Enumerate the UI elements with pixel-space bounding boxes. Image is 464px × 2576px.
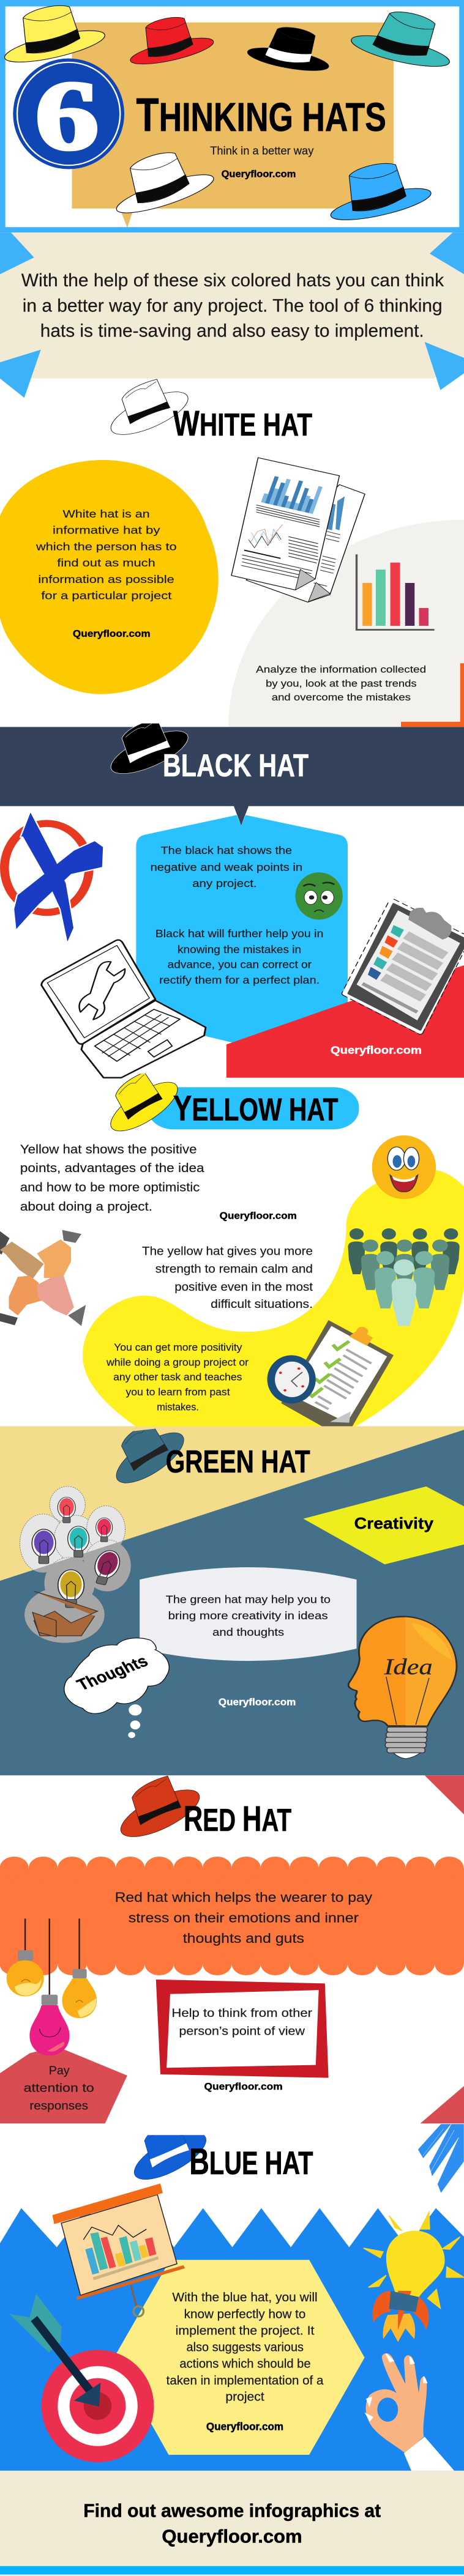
text: black hat description 1: [151, 844, 302, 889]
brand: Queryfloor.com: [220, 1209, 297, 1221]
footer cream panel: [0, 2471, 464, 2566]
intro ribbon: hats is time-saving and also easy to implement.: [40, 321, 424, 341]
text: white hat description: informative hat by: [53, 524, 160, 536]
footer text: Find out awesome infographics at: [83, 2501, 381, 2522]
icon: idea head bulb: Idea: [383, 1655, 433, 1680]
brand: Queryfloor.com: [331, 1045, 422, 1056]
icon: blue fedora: [133, 2135, 206, 2180]
center text panel: [140, 1567, 357, 1661]
panel: pay attention: [0, 2046, 127, 2123]
text: yellow hat intro: about doing a project.: [20, 1199, 152, 1213]
text: black hat description 1: negative and weak points in: [151, 861, 302, 874]
panel: pay attention: attention to: [24, 2081, 94, 2095]
sand background: [0, 1426, 464, 1775]
center text panel: The green hat may help you to: [166, 1594, 331, 1606]
center text panel: bring more creativity in ideas: [168, 1609, 328, 1622]
icon: teal top hat: [343, 0, 464, 92]
text: blue hat description: also suggests various: [187, 2340, 304, 2355]
heading: RED HAT: [184, 1799, 291, 1839]
text: blue hat description: With the blue hat, you will: [172, 2290, 318, 2304]
section: yellow hat: [0, 1067, 464, 1427]
text: group positivity: while doing a group project or: [106, 1357, 249, 1368]
text: analyze: Analyze the information collected: [256, 664, 426, 675]
icon: green fedora: [116, 1429, 184, 1483]
section: blue hat: [0, 2119, 464, 2576]
icon: red fedora: [113, 1776, 208, 1846]
icon: laptop with wrench: [42, 940, 206, 1078]
icon: yellow fedora: [110, 1073, 178, 1132]
intro ribbon: [0, 232, 464, 398]
panel: other point of view: [156, 1980, 329, 2078]
text: blue hat description: implement the project. It: [176, 2323, 315, 2338]
text: blue hat description: project: [225, 2389, 264, 2403]
text: black hat description 2: rectify them for a perfect plan.: [159, 974, 320, 986]
brand: Queryfloor.com: [219, 1696, 296, 1707]
text: group positivity: [106, 1342, 249, 1413]
icon: smiling emoji: [372, 1135, 436, 1199]
icon: joined hands: [0, 1230, 86, 1326]
text: white hat description: find out as much: [57, 557, 155, 570]
icon: crossed circle: [4, 812, 103, 941]
text: black hat description 2: knowing the mistakes in: [178, 943, 301, 956]
brand: Queryfloor.com: [204, 2080, 283, 2092]
panel: other point of view: Help to think from other: [171, 2006, 312, 2020]
blue scribble: [418, 2124, 464, 2193]
text: blue hat description: know perfectly how to: [184, 2307, 305, 2322]
text: black hat description 1: The black hat shows the: [160, 844, 292, 857]
icon: target with arrow: [9, 2294, 154, 2462]
text: yellow hat intro: [20, 1142, 204, 1213]
icon: black top hat: [241, 13, 343, 92]
heading: GREEN HAT: [166, 1445, 310, 1480]
text: yellow hat strength: difficult situations.: [211, 1297, 313, 1310]
text: black hat description 2: Black hat will further help you in: [155, 927, 323, 940]
text: white hat description: information as possible: [38, 573, 174, 585]
text: analyze: [256, 664, 426, 703]
text: yellow hat intro: points, advantages of the idea: [20, 1161, 204, 1175]
icon: blue top hat: [327, 163, 434, 226]
badge: number 6: 6: [35, 61, 99, 171]
icon: white top hat: [107, 149, 220, 221]
panel: pay attention: responses: [29, 2099, 88, 2112]
top-right triangle: [425, 1775, 464, 1814]
thought bubble: [64, 1638, 169, 1738]
panel: pay attention: Pay: [49, 2063, 70, 2077]
text: yellow hat intro: Yellow hat shows the positive: [20, 1142, 196, 1156]
footer bottom edge: [0, 2575, 464, 2576]
icon: white fedora: [103, 379, 196, 443]
grey quarter circle: [228, 520, 464, 727]
subtitle: Think in a better way: [210, 145, 313, 157]
section: green hat: [0, 1418, 464, 1775]
text: group positivity: You can get more positivity: [114, 1342, 242, 1353]
text: red hat description: stress on their emotions and inner: [129, 1910, 359, 1926]
text: analyze: and overcome the mistakes: [272, 691, 411, 703]
red corner panel: [226, 965, 464, 1078]
orange corner: [401, 663, 464, 727]
icon: checklist and clock: [268, 1320, 394, 1427]
heading: YELLOW HAT: [173, 1089, 339, 1129]
yellow blob: [0, 460, 219, 694]
text: blue hat description: actions which should be: [179, 2357, 311, 2371]
icon: yellow top hat: [1, 6, 108, 69]
text: red hat description: Red hat which helps the wearer to pay: [115, 1890, 372, 1905]
text: yellow hat strength: strength to remain calm and: [155, 1262, 313, 1275]
blue hexagon panel: [136, 815, 348, 1044]
scalloped orange band: [0, 1857, 464, 1975]
icon: hanging bulbs: [7, 1918, 97, 2055]
panel: other point of view: person’s point of view: [179, 2024, 305, 2038]
text: red hat description: thoughts and guts: [183, 1931, 304, 1946]
text: group positivity: you to learn from past: [125, 1387, 230, 1398]
text: white hat description: White hat is an: [62, 508, 150, 520]
slate diagonal background: [0, 1430, 464, 1775]
icon: black fedora: [110, 723, 189, 774]
text: blue hat description: taken in implementation of a: [167, 2374, 324, 2388]
orange title panel: [72, 23, 394, 228]
heading: BLUE HAT: [189, 2141, 313, 2182]
icon: clipboard sticker: [345, 901, 464, 1032]
yellow wave: [83, 1169, 464, 1427]
bottom-right triangle: [420, 2086, 464, 2123]
text: group positivity: mistakes.: [157, 1401, 199, 1413]
footer blue strip: [0, 2566, 464, 2575]
slate end of the previous band: [0, 1762, 464, 1775]
thought bubble: Thoughts: [73, 1652, 151, 1694]
icon: worried green emoji: [295, 872, 343, 919]
footer text: [83, 2501, 381, 2547]
text: black hat description 2: [155, 927, 323, 986]
text: white hat description: [36, 508, 177, 602]
section: header: [0, 0, 464, 398]
brand: Queryfloor.com: [73, 628, 151, 639]
center text panel: and thoughts: [212, 1626, 284, 1638]
section: white hat: [0, 379, 464, 727]
bar chart: [357, 554, 435, 629]
section: red hat: [0, 1762, 464, 2123]
text: white hat description: for a particular project: [41, 590, 172, 602]
icon: people group: [348, 1228, 460, 1326]
text: white hat description: which the person has to: [36, 541, 177, 553]
section: black hat: [0, 718, 464, 1078]
blue zigzag background: [0, 2208, 464, 2471]
text: group positivity: any other task and teaches: [113, 1372, 242, 1383]
text: yellow hat intro: and how to be more optimistic: [20, 1180, 200, 1194]
navy heading band: [0, 727, 464, 826]
text: blue hat description: [167, 2290, 324, 2403]
yellow hexagon: [114, 2260, 365, 2455]
badge: number 6: [13, 59, 124, 171]
yellow creativity tag: [304, 1487, 464, 1564]
icon: rocket bulb: [364, 2212, 464, 2342]
icon: idea head bulb: [348, 1617, 457, 1759]
icon: presentation board: [53, 2183, 185, 2317]
heading: BLACK HAT: [163, 748, 309, 783]
text: yellow hat strength: positive even in the most: [174, 1280, 313, 1294]
text: yellow hat strength: [142, 1244, 313, 1310]
icon: red top hat: [128, 17, 216, 69]
text: red hat description: [115, 1890, 372, 1946]
footer text: Queryfloor.com: [162, 2526, 302, 2547]
heading: WHITE HAT: [173, 404, 312, 444]
label: creativity: Creativity: [354, 1515, 434, 1532]
blue title pill: [148, 1087, 359, 1129]
brand: Queryfloor.com: [206, 2420, 283, 2433]
text: black hat description 2: advance, you can correct or: [168, 959, 312, 971]
text: black hat description 1: any project.: [192, 877, 257, 889]
text: yellow hat strength: The yellow hat gives you more: [142, 1244, 313, 1258]
icon: report pages: [231, 458, 365, 602]
header blue frame: [0, 0, 464, 232]
icon: OK hand: [366, 2353, 454, 2471]
text: analyze: by you, look at the past trends: [266, 678, 417, 689]
icon: light bulbs in box: [20, 1487, 131, 1642]
brand: Queryfloor.com: [222, 168, 296, 179]
